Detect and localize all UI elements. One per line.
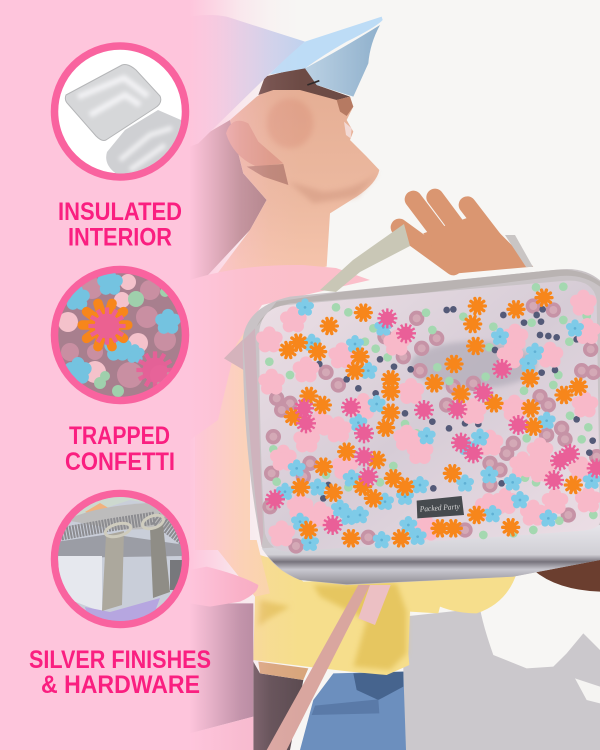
bag handle (320, 224, 410, 292)
confetti orange daisies (280, 290, 586, 546)
label: insulated interior (58, 198, 182, 252)
tan belt (258, 662, 308, 680)
pink star lower (136, 351, 174, 389)
clear window (259, 281, 600, 552)
confetti sequins and dots (262, 282, 600, 554)
visor top (269, 17, 383, 75)
lower silver band (262, 525, 600, 584)
smock shadows (258, 583, 407, 670)
zipper pull one (102, 531, 124, 611)
label: silver finishes and hardware: & HARDWARE (41, 671, 200, 699)
tumbler body (190, 603, 253, 733)
strap tab (358, 585, 391, 625)
pink shirt panel (190, 265, 370, 440)
glitter top trim (257, 270, 600, 327)
tumbler base (190, 717, 253, 750)
dark clip on right (170, 560, 182, 590)
panel: insulated interior (54, 46, 186, 252)
label: insulated interior: INTERIOR (68, 224, 172, 252)
badge: trapped confetti photo (54, 270, 186, 400)
jeans dark panel (353, 672, 403, 700)
lunch bag (224, 269, 600, 585)
badge: silver hardware photo (50, 490, 190, 625)
face and neck (210, 67, 379, 283)
zipper teeth (55, 518, 185, 540)
jeans (300, 672, 406, 750)
eyelash (307, 81, 319, 85)
confetti under pocket (85, 598, 160, 621)
label: insulated interior: INSULATED (58, 198, 182, 226)
tumbler lid (190, 567, 258, 607)
orange daisy (82, 303, 128, 347)
light pink petals (58, 274, 148, 383)
metallic strip (55, 534, 185, 558)
ear (226, 121, 283, 167)
shadow under hat (258, 67, 350, 100)
curved silver trim (65, 503, 178, 530)
label: silver finishes and hardware: SILVER FINISHES (29, 646, 211, 674)
peach blouse behind bag (195, 300, 250, 550)
lower wrinkles (120, 128, 172, 170)
label: trapped confetti: TRAPPED (69, 422, 170, 450)
confetti pink flowers (256, 290, 600, 546)
orange and blue confetti peek (85, 503, 108, 512)
clear pocket highlight (58, 556, 102, 612)
zipper pull two (150, 524, 170, 598)
hand (399, 197, 533, 274)
woman's head and hat (190, 15, 533, 287)
pink star (88, 307, 126, 345)
badge: insulated interior photo (54, 46, 186, 185)
lips (344, 122, 352, 138)
cheek blush (267, 98, 313, 148)
visor underside (305, 25, 380, 97)
lower lining (106, 110, 181, 174)
label: trapped confetti (65, 422, 175, 476)
bag body (243, 269, 600, 585)
behind-ear shadow (247, 164, 288, 185)
window shadow (410, 342, 537, 388)
jeans pocket band (312, 699, 379, 715)
wall background (180, 0, 600, 750)
nose shadow (337, 97, 353, 116)
pink bag strap (267, 585, 370, 750)
left zipper (243, 328, 263, 547)
panel: silver finishes and hardware (29, 490, 211, 699)
dark undershirt (253, 662, 303, 750)
woman's torso and lower body (190, 540, 600, 750)
hair (190, 120, 267, 287)
confetti blue flowers (276, 298, 600, 551)
bag logo script: Packed Party (419, 502, 460, 514)
wall shadow (403, 608, 600, 750)
label: silver finishes and hardware (29, 646, 211, 699)
green confetti (94, 287, 170, 397)
blue flowers (64, 270, 181, 384)
jaw shadow (288, 172, 379, 203)
hat mesh (190, 15, 305, 147)
glitter sequins (61, 277, 176, 388)
sunlit spot (575, 678, 600, 703)
panel: trapped confetti (54, 270, 186, 476)
confetti magenta stars (265, 308, 600, 535)
confetti peek (74, 497, 146, 518)
lid wrinkles (78, 78, 148, 115)
open lid lining (65, 65, 161, 140)
handle right side (505, 235, 533, 267)
zipper tab (224, 320, 253, 373)
zipper loop two (141, 514, 165, 530)
bag logo patch (417, 496, 464, 518)
right forearm (533, 558, 600, 592)
zipper loop one (104, 521, 132, 539)
label: trapped confetti: CONFETTI (65, 448, 175, 476)
yellow top (210, 540, 517, 675)
peach side of top (210, 540, 270, 597)
